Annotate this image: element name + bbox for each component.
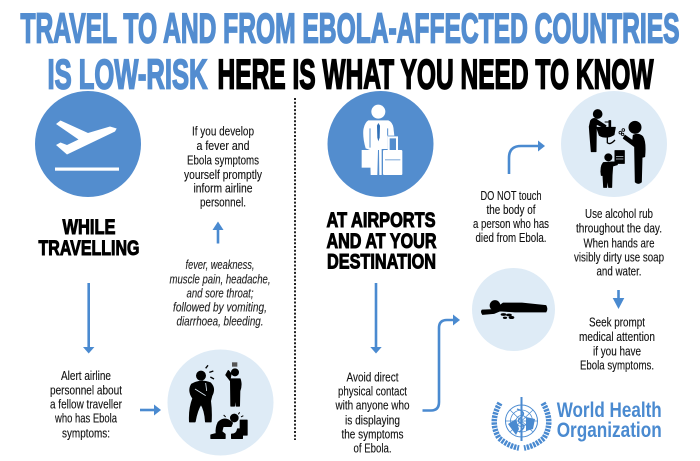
text: develop a fever: [184, 125, 263, 210]
text: alert airline personnel: [50, 369, 122, 440]
icon: WHO emblem: [494, 397, 549, 448]
text: seek medical attention: [579, 316, 655, 372]
arrow: down right: [613, 290, 624, 309]
heading: at airports: DESTINATION: [327, 250, 436, 274]
text: develop a fever: If you develop: [192, 125, 254, 139]
text: avoid direct contact: physical contact: [338, 385, 407, 399]
text: develop a fever: inform airline: [194, 182, 253, 196]
heading: at airports: AND AT YOUR: [326, 230, 436, 253]
text: alcohol rub: When hands are: [584, 236, 655, 250]
text: symptoms list: [170, 258, 270, 329]
icon: hand hygiene: [561, 91, 667, 197]
text: avoid direct contact: is displaying: [345, 413, 400, 427]
text: avoid direct contact: [335, 371, 410, 455]
arrow: down left: [83, 283, 94, 354]
icon: body on ground: [472, 268, 555, 351]
heading: at airports: AT AIRPORTS: [326, 209, 436, 232]
text: do not touch: [473, 189, 549, 245]
text: develop a fever: personnel.: [200, 196, 246, 210]
arrow: curved to body icon: [422, 314, 460, 410]
text: alcohol rub: and water.: [596, 265, 642, 279]
text: seek medical attention: Seek prompt: [589, 316, 645, 330]
title: [20, 4, 680, 98]
text: do not touch: died from Ebola.: [476, 231, 546, 245]
heading: while travelling: [38, 216, 140, 260]
text: seek medical attention: medical attention: [579, 330, 655, 344]
heading: while travelling: WHILE: [62, 216, 116, 239]
text: avoid direct contact: the symptoms: [342, 427, 404, 441]
arrow: up: [212, 222, 224, 244]
arrow: curved to hygiene icon: [509, 140, 545, 174]
text: symptoms list: diarrhoea, bleeding.: [176, 315, 264, 329]
text: alcohol rub: [574, 207, 664, 279]
text: alert airline personnel: symptoms:: [62, 426, 110, 440]
text: avoid direct contact: Avoid direct: [346, 371, 399, 385]
text: develop a fever: Ebola symptoms: [187, 153, 259, 167]
title: IS LOW-RISK: [48, 50, 208, 98]
text: seek medical attention: if you have: [593, 344, 641, 358]
text: alcohol rub: throughout the day.: [576, 222, 662, 236]
logo: World Health Organization: World Health: [557, 399, 662, 422]
icon: traveller with luggage: [328, 91, 434, 197]
text: alert airline personnel: who has Ebola: [54, 412, 117, 426]
heading: while travelling: TRAVELLING: [38, 237, 140, 260]
text: develop a fever: a fever and: [196, 139, 250, 153]
arrow: down middle: [370, 283, 382, 354]
icon: sick people: [168, 350, 274, 456]
text: symptoms list: muscle pain, headache,: [170, 272, 270, 286]
text: avoid direct contact: with anyone who: [335, 399, 410, 413]
text: alert airline personnel: a fellow traveller: [50, 397, 122, 411]
logo: World Health Organization: Organization: [557, 419, 662, 442]
text: do not touch: DO NOT touch: [480, 189, 542, 203]
icon: airplane departure: [35, 91, 141, 197]
arrow: right: [140, 404, 161, 416]
text: do not touch: the body of: [486, 203, 536, 217]
text: alert airline personnel: Alert airline: [61, 369, 111, 383]
text: alert airline personnel: personnel about: [50, 383, 122, 397]
logo: World Health Organization: [494, 397, 662, 448]
heading: at airports: [326, 209, 436, 274]
text: symptoms list: fever, weakness,: [186, 258, 254, 272]
text: symptoms list: followed by vomiting,: [173, 301, 267, 315]
text: avoid direct contact: of Ebola.: [354, 441, 392, 455]
text: seek medical attention: Ebola symptoms.: [580, 358, 654, 372]
text: develop a fever: yourself promptly: [184, 168, 263, 182]
text: symptoms list: and sore throat;: [186, 287, 254, 301]
text: do not touch: a person who has: [473, 217, 549, 231]
text: alcohol rub: visibly dirty use soap: [574, 251, 664, 265]
text: alcohol rub: Use alcohol rub: [585, 207, 653, 221]
